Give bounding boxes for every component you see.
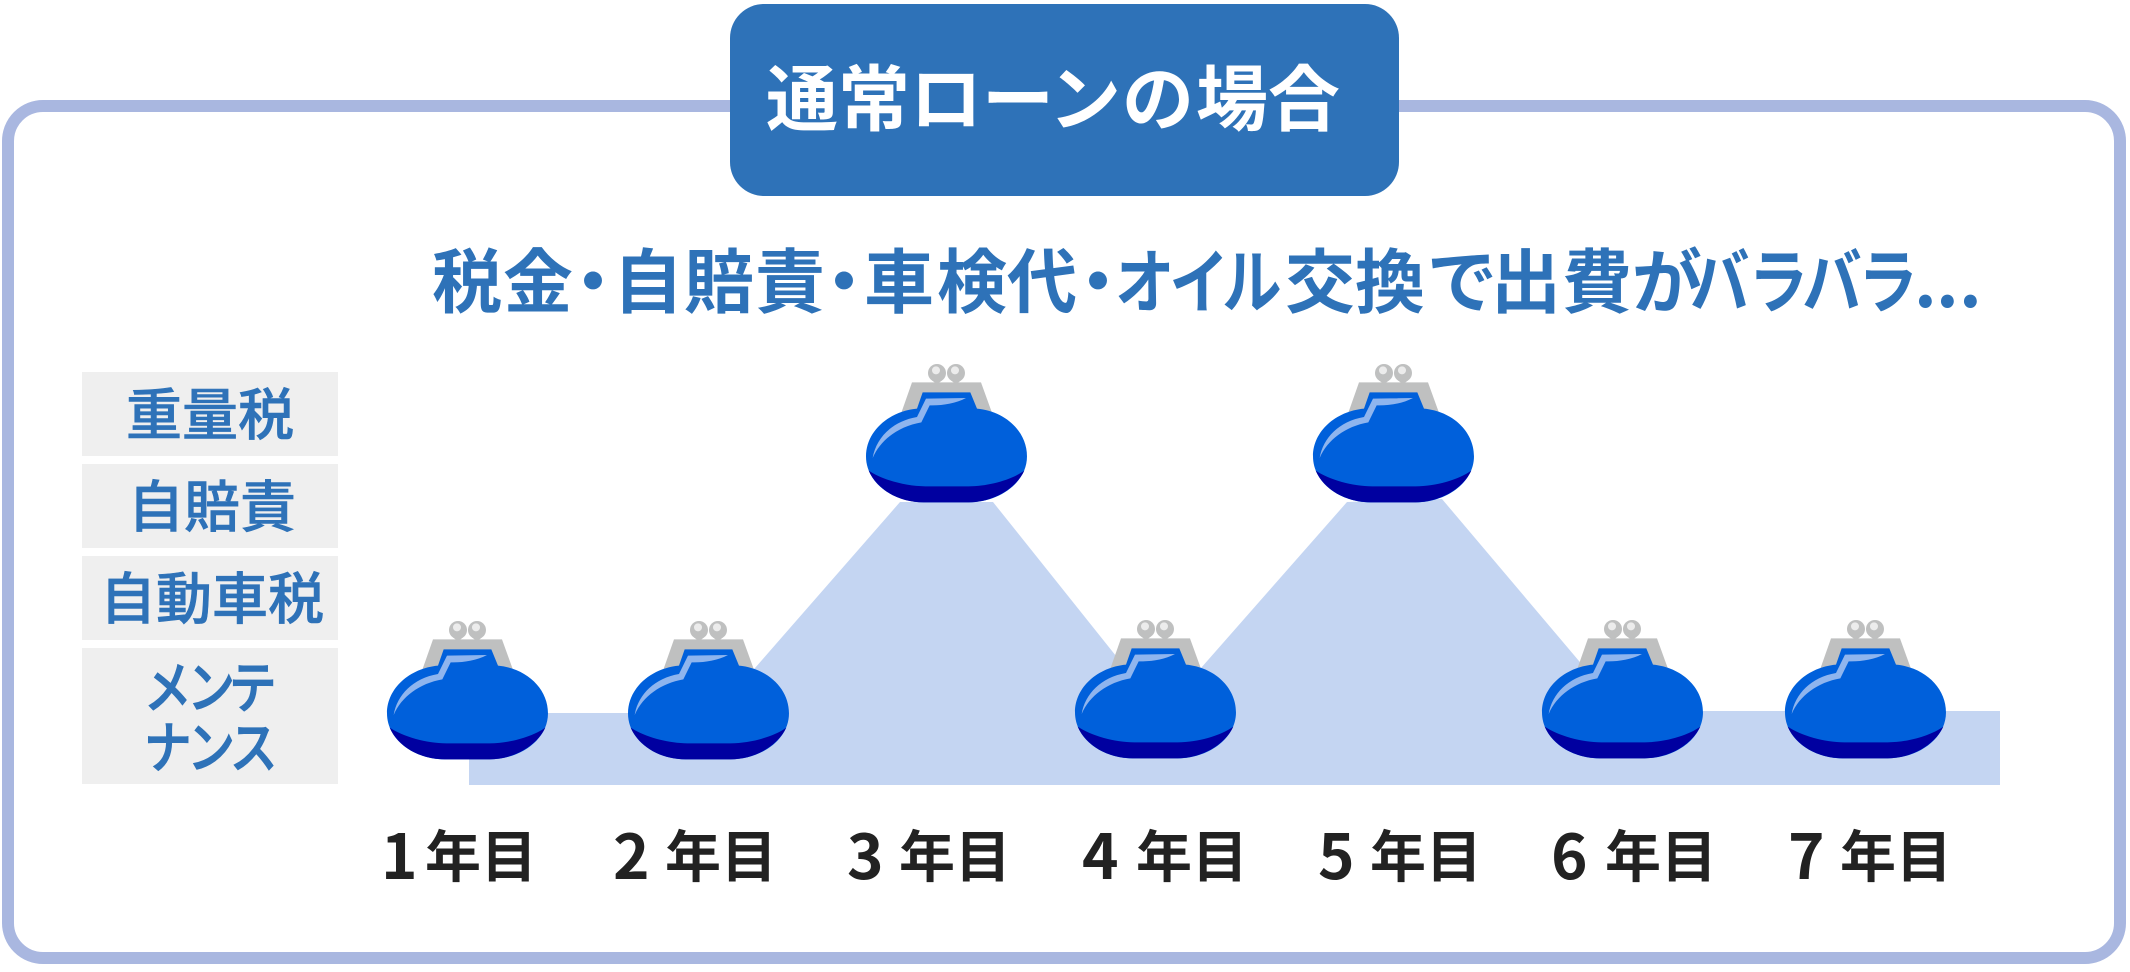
legend item: 自賠責: 自賠責 — [128, 463, 296, 544]
subtitle — [432, 226, 1982, 328]
area chart: yearly cost fluctuation — [469, 499, 2000, 785]
year 2 label: 2 — [613, 807, 650, 897]
year 5 label: 5 — [1318, 807, 1355, 897]
legend item: 重量税 — [82, 371, 338, 456]
title text: 通常ローンの場合 — [766, 41, 1340, 146]
subtitle: 交換で出費が — [1285, 227, 1702, 328]
year 7 label: 7 — [1788, 807, 1825, 897]
icon: purse year 6 — [1542, 620, 1703, 758]
legend item: 自動車税: 自動車税 — [100, 555, 324, 636]
year 1 label: 年目 — [425, 813, 537, 894]
title badge — [730, 4, 1399, 196]
axis labels: years — [381, 807, 1952, 897]
legend item: 自賠責 — [82, 463, 338, 548]
year 4 label: 年目 — [1136, 813, 1248, 894]
subtitle: バラバラ — [1690, 226, 1918, 327]
legend item: メンテナンス: ナンス — [144, 703, 277, 784]
legend item: メンテナンス: メンテ — [144, 643, 277, 724]
legend item: メンテナンス — [82, 643, 338, 784]
icon: purse year 7 — [1785, 620, 1946, 758]
year 5 label: 年目 — [1370, 813, 1482, 894]
subtitle: 税金・自賠責・車検代・ — [432, 227, 1133, 328]
year 2 label: 年目 — [665, 813, 777, 894]
icon: purse year 2 — [628, 621, 789, 759]
icon: purse year 5 — [1313, 364, 1474, 502]
year 6 label: 年目 — [1605, 813, 1717, 894]
year 6 label: 6 — [1551, 807, 1588, 897]
subtitle: ... — [1914, 227, 1982, 328]
icon: purse year 1 — [387, 621, 548, 759]
year 1 label: 1 — [381, 807, 418, 897]
year 7 label: 年目 — [1840, 813, 1952, 894]
legend: cost categories — [82, 371, 338, 784]
subtitle: オイル — [1115, 226, 1282, 327]
year 3 label: 3 — [847, 807, 884, 897]
legend item: 重量税: 重量税 — [126, 371, 294, 452]
year 3 label: 年目 — [899, 813, 1011, 894]
icon: purse year 3 — [866, 364, 1027, 502]
year 4 label: 4 — [1082, 807, 1119, 897]
icon: purse year 4 — [1075, 620, 1236, 758]
